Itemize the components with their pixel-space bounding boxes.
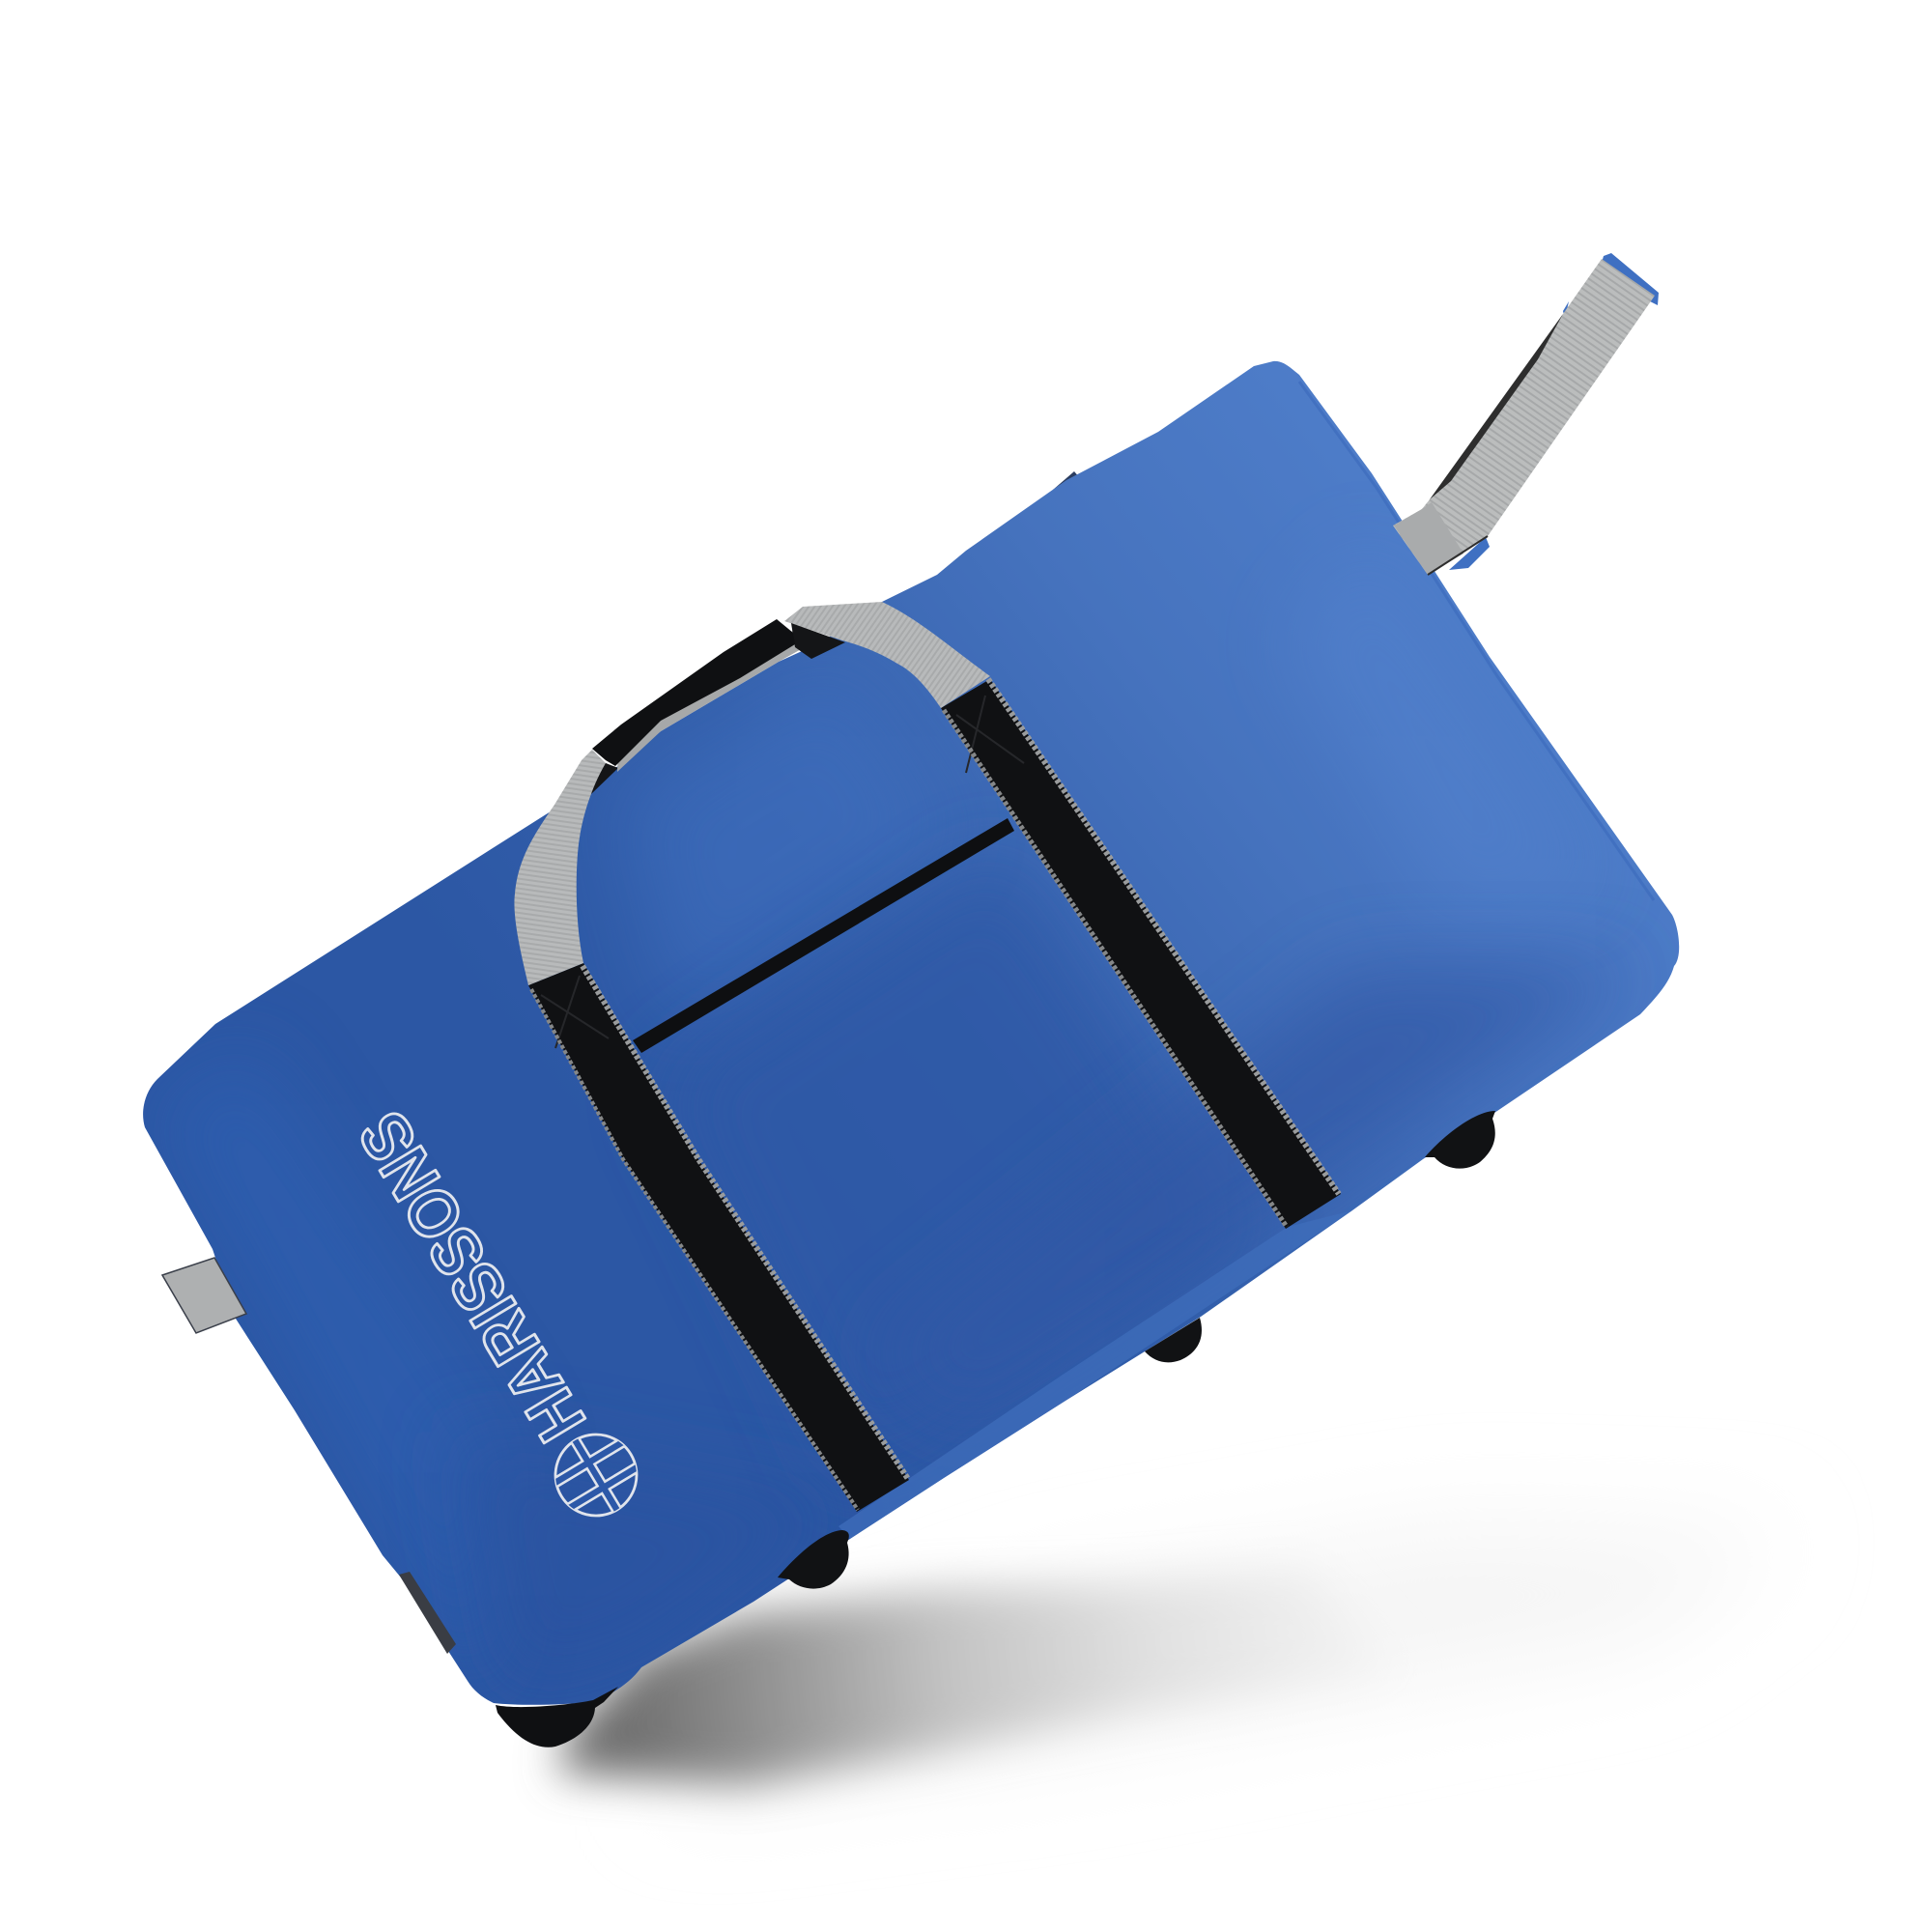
strap: stitched edges bbox=[944, 710, 1287, 1227]
strap: black backing behind top of strap bbox=[591, 761, 618, 794]
tab: grey webbing bbox=[1393, 259, 1655, 575]
grip: black underside at right end bbox=[791, 623, 845, 659]
wheel: rear middle bbox=[1145, 1318, 1202, 1362]
strap: grey upper section bbox=[514, 750, 606, 985]
dark base edge bbox=[399, 1572, 456, 1654]
bag body bbox=[143, 361, 1679, 1705]
tab: dark underside bbox=[1430, 314, 1563, 499]
wheel: far right bbox=[1425, 1111, 1495, 1169]
tab: stitched fold bbox=[1394, 502, 1463, 575]
ground shadow bbox=[557, 1526, 1787, 1797]
small dark fold behind top edge bbox=[1053, 471, 1080, 493]
fabric shading bbox=[145, 382, 1654, 1700]
strap: black lower section bbox=[941, 679, 1341, 1229]
strap: black lower section bbox=[528, 963, 909, 1512]
product photo: wheeled duffel bag bbox=[143, 253, 1679, 1817]
front pocket zipper bbox=[633, 818, 1014, 1053]
strap: x stitching bbox=[956, 696, 1024, 773]
left handle strap bbox=[514, 750, 909, 1512]
wheels bbox=[496, 1111, 1495, 1747]
strap: x stitching bbox=[541, 976, 609, 1048]
top carry tab bbox=[1393, 253, 1659, 575]
grip: grey webbing underside bbox=[617, 628, 813, 772]
wheel: front middle bbox=[778, 1530, 849, 1589]
padded black grip bbox=[592, 619, 845, 772]
brand wordmark: HARISSONS bbox=[344, 1098, 601, 1454]
wheel: corner caster bbox=[496, 1687, 618, 1747]
right handle strap bbox=[784, 602, 1341, 1229]
brand logo bbox=[361, 1113, 638, 1517]
bottom-left side tab bbox=[162, 1258, 246, 1333]
strap: grey upper section bbox=[784, 602, 990, 708]
brand emblem bbox=[554, 1434, 638, 1517]
grip: black sleeve bbox=[592, 619, 795, 766]
tab: blue end cap bbox=[1563, 253, 1659, 319]
tab: blue under base bbox=[1449, 537, 1490, 570]
strap: stitched edges bbox=[531, 989, 858, 1510]
